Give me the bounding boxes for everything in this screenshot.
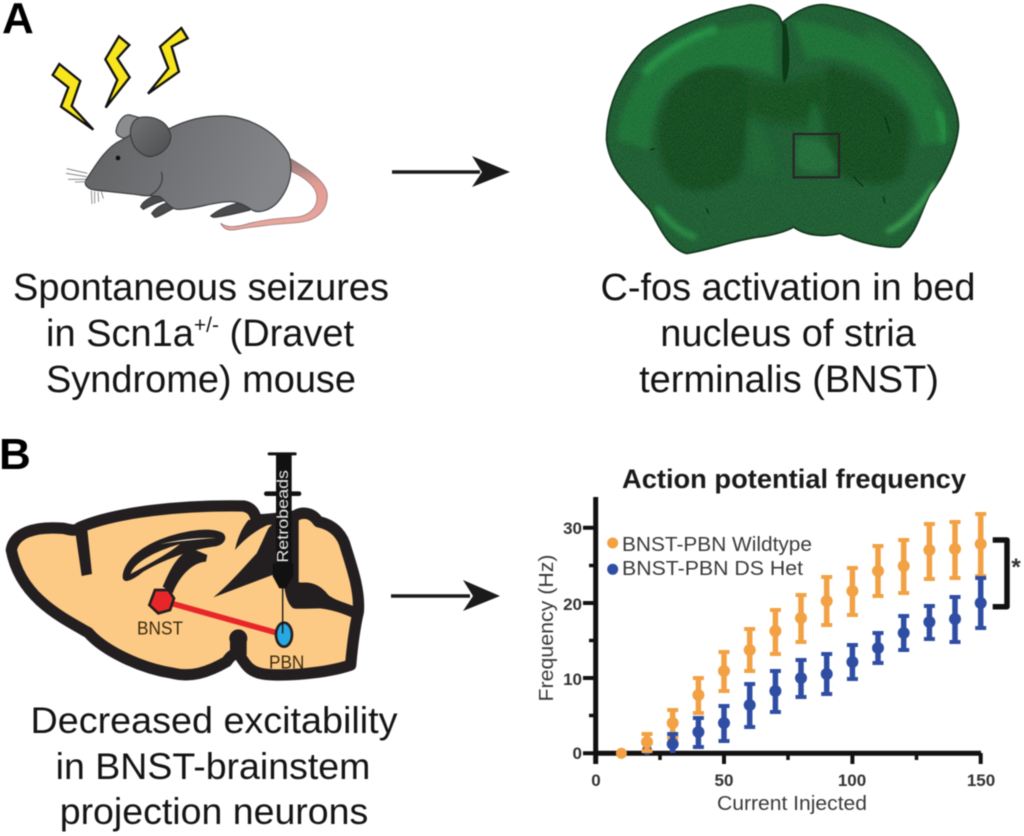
y axis tick labels: 20 [563, 595, 582, 614]
icon: mouse with seizure bolts [53, 28, 327, 230]
projection line [162, 601, 283, 635]
chart title: Action potential frequency [622, 464, 966, 494]
syringe [264, 452, 301, 633]
x axis tick labels: 150 [967, 771, 995, 790]
caption: decreased excitability [30, 699, 398, 832]
PBN node [276, 623, 292, 647]
chart: action potential frequency [535, 464, 1021, 815]
diagram: sagittal brain with retrobead injection: BNST [137, 618, 183, 639]
icon: mouse [66, 115, 327, 230]
x axis tick labels: 50 [715, 771, 733, 790]
diagram: sagittal brain with retrobead injection: Retrobeads [275, 470, 292, 563]
caption: spontaneous seizures [13, 267, 389, 401]
striatum dark regions [658, 67, 753, 190]
brain outline [11, 506, 359, 675]
x axis tick labels [591, 771, 995, 790]
caption: decreased excitability: in BNST-brainstem [56, 745, 370, 787]
caption: c-fos activation: terminalis (BNST) [639, 359, 939, 401]
significance bracket: * [1011, 554, 1021, 581]
image: c-fos coronal brain slice [600, 0, 967, 260]
caption: decreased excitability: projection neurons [60, 790, 368, 832]
BNST node [149, 590, 174, 613]
y axis title: Frequency (Hz) [535, 554, 558, 702]
icon: lightning bolts [53, 28, 188, 130]
y axis tick labels: 10 [563, 670, 582, 689]
internal structures [75, 515, 362, 655]
diagram: sagittal brain with retrobead injection [11, 452, 362, 675]
caption: spontaneous seizures: in Scn1a [46, 313, 194, 355]
y axis tick labels [563, 519, 582, 763]
caption: c-fos activation: C-fos activation in bed [600, 267, 976, 309]
x axis title: Current Injected [717, 793, 867, 815]
arrow: brain to chart [391, 580, 500, 611]
series: wildtype [616, 514, 987, 759]
septal lighter patches [795, 138, 837, 172]
diagram: sagittal brain with retrobead injection: PBN [269, 651, 304, 672]
caption: decreased excitability: Decreased excitability [30, 699, 398, 741]
cortex band [617, 20, 775, 150]
caption: spontaneous seizures: +/- [194, 314, 219, 337]
legend [607, 533, 812, 580]
series: DS het [667, 578, 987, 753]
legend: BNST-PBN Wildtype [622, 533, 812, 556]
axes [583, 497, 981, 764]
significance bracket [993, 540, 1021, 607]
caption: c-fos activation: nucleus of stria [660, 313, 917, 355]
x axis tick labels: 100 [838, 771, 866, 790]
caption: spontaneous seizures: (Dravet [219, 313, 355, 355]
caption: spontaneous seizures: Spontaneous seizures [13, 267, 389, 309]
arrow: mouse to brain slice [392, 156, 510, 187]
legend: BNST-PBN DS Het [622, 557, 803, 580]
x axis tick labels: 0 [591, 771, 601, 790]
y axis tick labels: 0 [573, 744, 582, 763]
lower bright streaks [657, 207, 697, 237]
caption: c-fos activation [600, 267, 976, 401]
y axis tick labels: 30 [563, 519, 582, 538]
caption: spontaneous seizures: Syndrome) mouse [46, 359, 356, 401]
